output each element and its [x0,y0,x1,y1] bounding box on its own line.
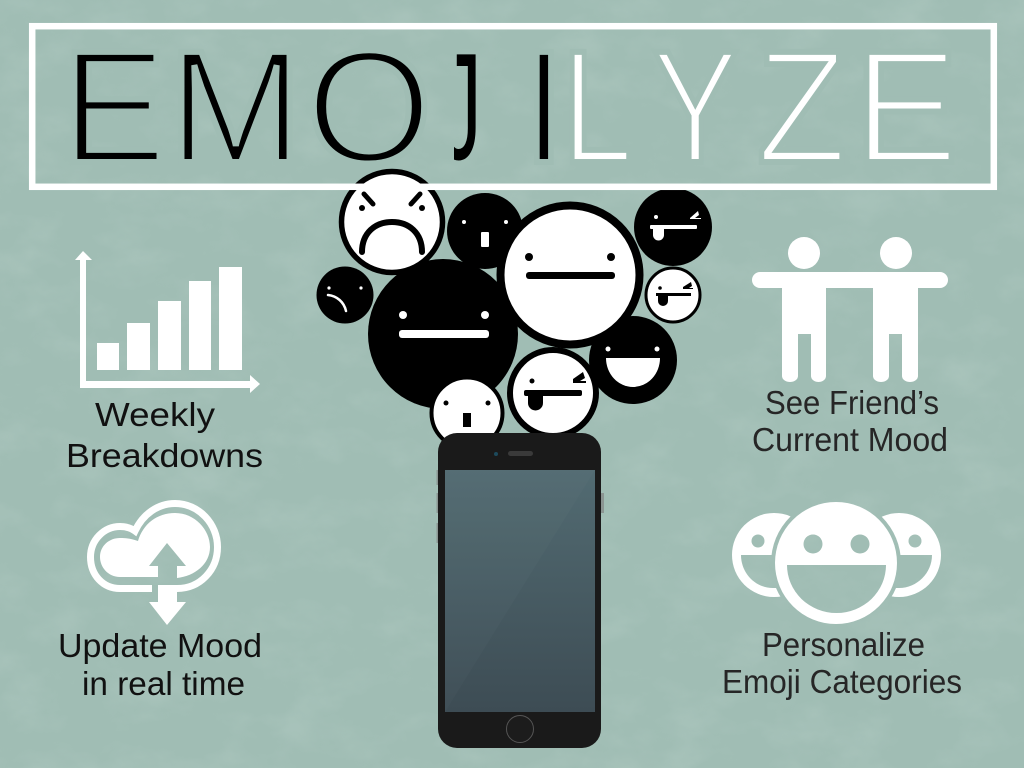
label: Personalize Emoji Categories [722,626,962,700]
title: EMOJI [77,53,548,160]
label: Update Mood in real time [58,627,262,702]
phone screen [445,470,595,712]
title panel [32,17,994,197]
label: See Friend's Current Mood: See Friend’s [765,384,939,421]
title frame [32,26,994,187]
icon: cloud sync [90,504,218,625]
label: See Friend's Current Mood [752,384,948,458]
emoji cluster [316,172,712,448]
label: Update Mood in real time: Update Mood [58,627,262,664]
side buttons [436,470,604,543]
phone body [438,433,601,748]
emoji: black surprised [447,193,523,269]
label: Weekly Breakdowns: Breakdowns [66,437,263,474]
screen glare [445,470,595,712]
icon: two friends [752,237,948,382]
icon: emoji faces [732,502,941,624]
title: EMOJI: J [440,21,482,191]
phone speaker [508,451,533,456]
label: Personalize Emoji Categories: Personalize [762,626,925,663]
title: LYZE: Y [652,17,738,196]
label: See Friend's Current Mood: Current Mood [752,421,948,458]
title: LYZE: Z [757,17,847,196]
title: EMOJI: M [168,18,303,197]
emoji: white wink tongue [510,350,596,436]
title: LYZE: E [854,18,958,196]
label: Weekly Breakdowns: Weekly [95,396,216,433]
emoji: white angry [342,172,442,272]
emoji: white surprised [432,378,502,448]
emoji: black laughing [589,316,677,404]
emoji: small white wink tongue [646,268,700,322]
phone camera [494,452,498,456]
phone home button [506,716,534,742]
label: Weekly Breakdowns [66,396,263,474]
title: LYZE: L [562,17,633,196]
icon: bar chart [75,251,260,393]
title: EMOJI: I [523,17,565,196]
title: EMOJI: E [62,18,166,196]
title: EMOJI: O [306,18,432,197]
emoji: big black neutral [368,259,518,409]
emoji: black wink tongue [634,188,712,266]
emoji: big white neutral [500,206,640,344]
emoji: small black frown [316,266,374,324]
phone [436,433,604,748]
label: Personalize Emoji Categories: Emoji Categories [722,663,962,700]
label: Update Mood in real time: in real time [82,665,245,702]
title: LYZE [562,17,958,196]
